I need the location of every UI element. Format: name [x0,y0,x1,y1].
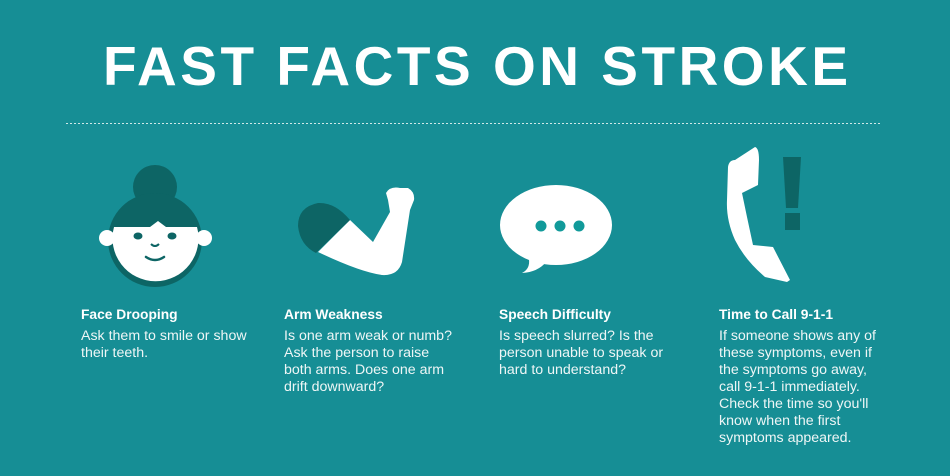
icons [99,147,801,287]
column: face drooping [81,307,247,361]
column: speech difficulty: Is speech slurred? Is the person unable to speak or hard to understand? [499,328,663,378]
column: time to call: If someone shows any of these symptoms, even if the symptoms go away, call 9-1-1 immediately. Check the time so you'll know when the first symptoms appeared. [719,328,876,446]
icon: phone [727,147,801,282]
title: FAST FACTS ON STROKE [103,35,848,97]
column: speech difficulty: Speech Difficulty [499,307,611,322]
column: arm weakness: Is one arm weak or numb? Ask the person to raise both arms. Does one arm drift downward? [284,328,452,395]
column: face drooping: Face Drooping [81,307,178,322]
column: face drooping: Ask them to smile or show their teeth. [81,328,247,361]
icon: face [99,165,212,287]
icon: speech bubble [500,185,612,273]
column: time to call: Time to Call 9-1-1 [719,307,833,322]
icon: arm [298,188,414,275]
column: arm weakness: Arm Weakness [284,307,383,322]
